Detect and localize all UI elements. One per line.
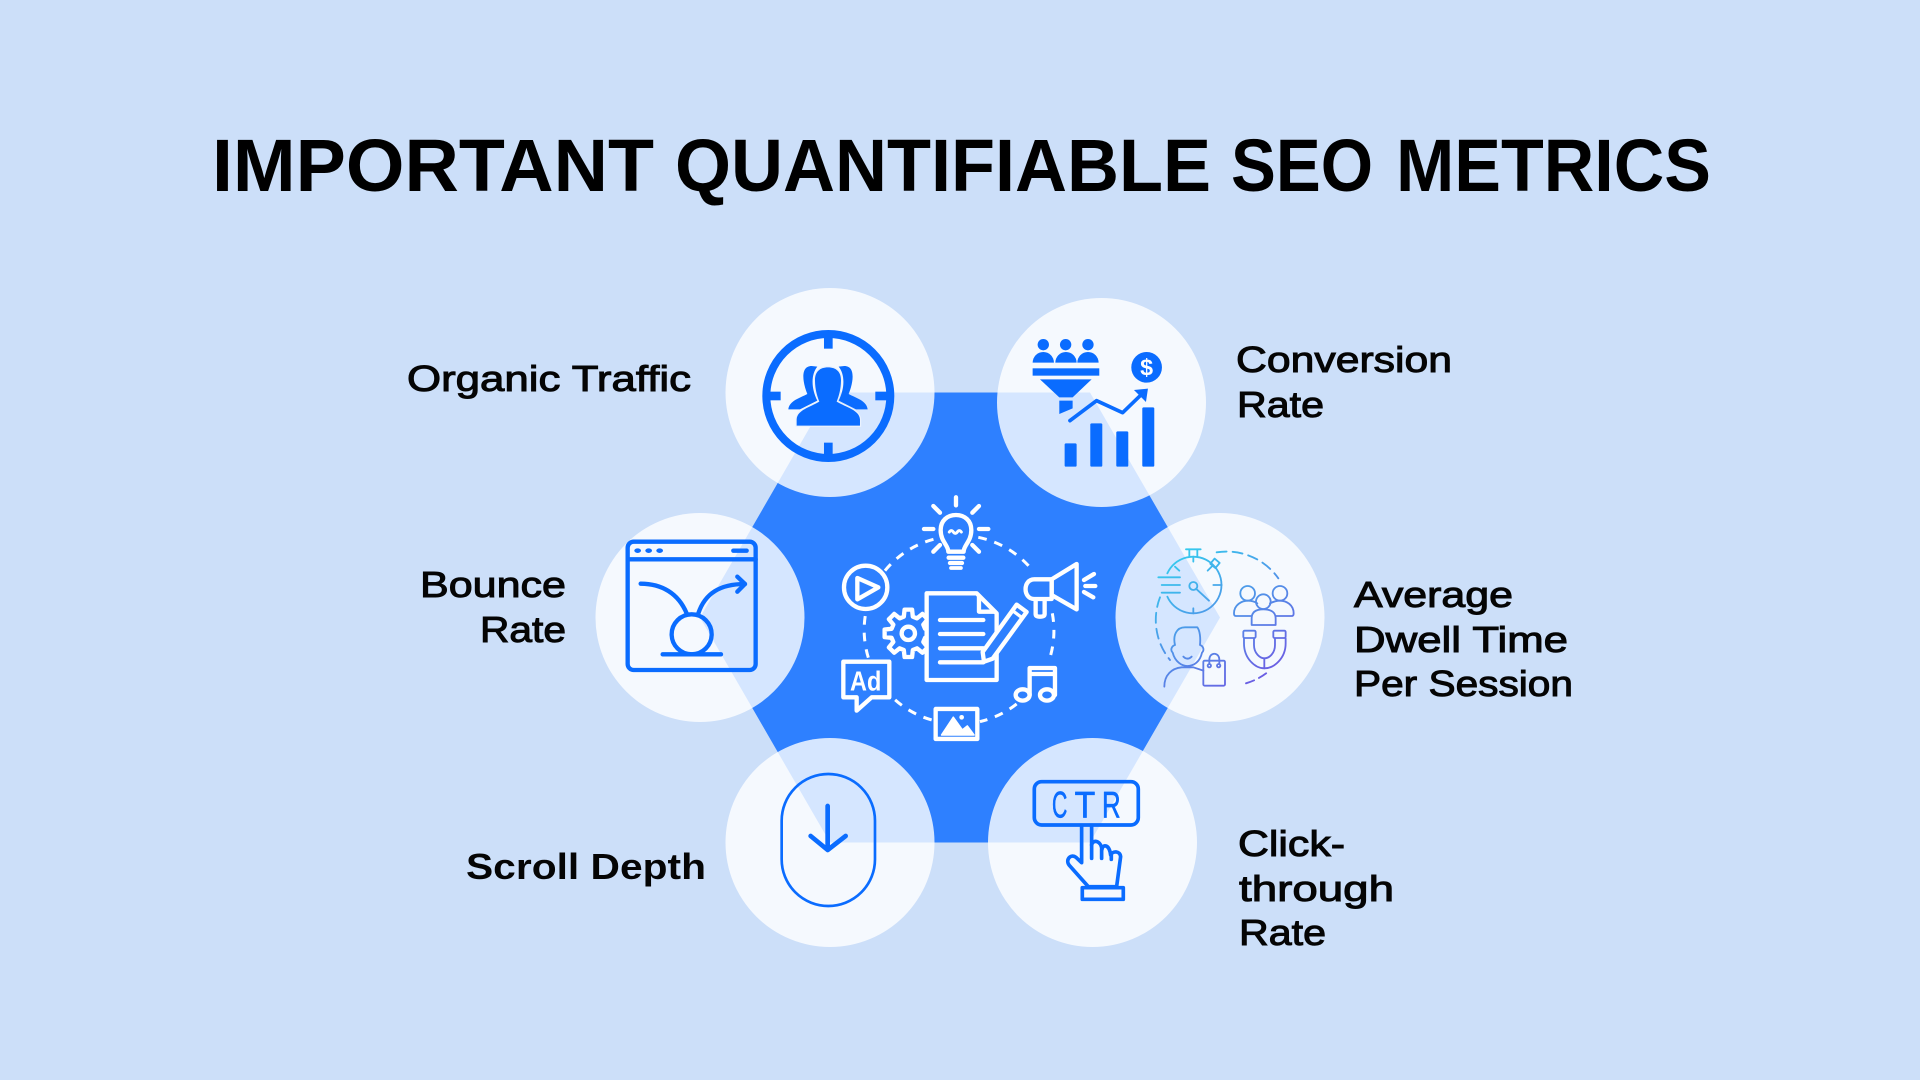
icon: conversion funnel and growth chart [1033,339,1162,467]
label: conversion rate: Conversion [1236,339,1452,380]
icon: music note [1016,668,1055,701]
label: bounce rate: Bounce [420,564,566,605]
icon: light bulb [924,497,988,568]
icon: bounce window [628,542,756,670]
icon: target audience [766,334,890,458]
label: click-through rate: through [1239,868,1394,909]
icon: conversion funnel and growth chart: $ [1140,355,1153,381]
icon: ad bubble: Ad [850,666,881,697]
label: average dwell time per session [1354,574,1573,704]
label: average dwell time per session: Per Session [1354,663,1573,704]
label: bounce rate: Rate [480,609,566,650]
title: QUANTIFIABLE [675,124,1211,207]
label: bounce rate [420,564,566,650]
icon: click-through rate hand [1034,782,1138,899]
title: METRICS [1396,124,1711,207]
title: SEO [1231,124,1373,207]
icon: central content marketing cycle [843,497,1095,739]
icon: document [927,593,997,680]
label: average dwell time per session: Dwell Time [1354,619,1568,660]
icon: scroll depth mouse [782,774,875,906]
icon: dwell time stopwatch, shopper, audience and magnet [1156,549,1294,687]
label: organic traffic: Organic Traffic [407,358,691,399]
icon: click-through rate hand: T [1075,784,1095,825]
icon: gear [885,610,932,657]
label: scroll depth: Scroll Depth [466,846,706,887]
translucent metric circles [596,288,1324,947]
label: conversion rate: Rate [1237,384,1324,425]
icon: megaphone [1026,564,1095,617]
dashed orbit [864,537,1054,722]
title: IMPORTANT [212,124,654,207]
icon: click-through rate hand: C [1052,784,1067,825]
icon: play button [844,566,887,609]
label: click-through rate: Rate [1239,912,1326,953]
label: conversion rate [1236,339,1452,425]
icon: ad bubble [843,662,889,711]
icon: pencil [983,605,1027,662]
icon: image [936,709,977,739]
label: click-through rate [1238,823,1394,953]
label: average dwell time per session: Average [1354,574,1513,615]
title [212,124,1711,207]
label: click-through rate: Click- [1238,823,1345,864]
central blue hexagon [700,392,1220,842]
icon: click-through rate hand: R [1102,784,1121,825]
